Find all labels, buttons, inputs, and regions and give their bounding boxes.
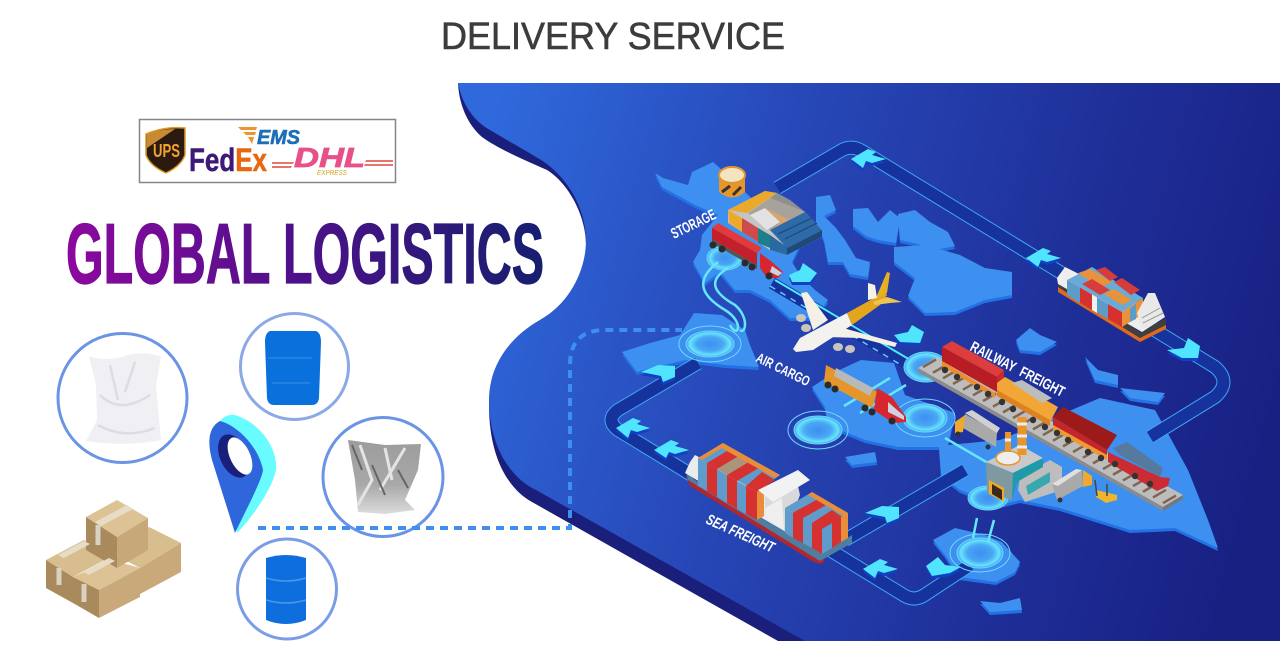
logo: EMS: [238, 127, 301, 149]
logo: UPS: [146, 128, 185, 173]
logo: DHL: EXPRESS: [317, 168, 347, 177]
top cargo ship: [1057, 267, 1166, 342]
product: foil bag: [323, 418, 443, 536]
forklift: [1095, 480, 1117, 503]
product: woven sack: [58, 334, 187, 462]
gray truck: [955, 410, 1000, 450]
arrows along the route: [616, 149, 1200, 578]
second gray truck: [1052, 469, 1092, 502]
aft container stack: [785, 492, 848, 554]
forward container stack: [698, 443, 780, 520]
shipping route: [612, 148, 1224, 598]
red truck: [710, 223, 783, 280]
logo: DHL: [272, 142, 393, 177]
dashed delivery route: [258, 330, 682, 528]
logo: EMS: EMS: [257, 127, 301, 149]
tanker truck: [824, 365, 906, 424]
location pin: [209, 415, 276, 533]
big container ship: [685, 443, 852, 564]
label: railway freight: RAILWAY FREIGHT: [967, 338, 1068, 401]
logo: DHL: DHL: [294, 142, 365, 173]
storage silo: [719, 167, 745, 198]
train: [942, 341, 1170, 491]
logo: FedEx: FedEx: [189, 142, 267, 178]
product: blue jerrycan: [240, 314, 348, 420]
factory: [986, 417, 1062, 502]
label: air cargo: AIR CARGO: [754, 349, 813, 389]
warehouse: [728, 191, 822, 255]
cyan roads: [703, 262, 994, 542]
railway track: [918, 357, 1183, 511]
ship bridge: [758, 470, 810, 532]
label: storage: STORAGE: [668, 206, 719, 243]
heading: global logistics: GLOBAL LOGISTICS: [66, 207, 544, 302]
cardboard boxes: [46, 500, 181, 618]
world map continents: [622, 162, 1218, 612]
label: sea freight: SEA FREIGHT: [703, 511, 778, 557]
airplane: [793, 272, 902, 353]
glowing location rings: [679, 246, 1010, 572]
courier logos box: [140, 120, 396, 182]
logo: UPS: UPS: [153, 141, 180, 161]
panel: blue logistics map: [458, 83, 1280, 641]
product: blue steel drum: [238, 539, 336, 639]
title: DELIVERY SERVICE: [441, 16, 785, 58]
